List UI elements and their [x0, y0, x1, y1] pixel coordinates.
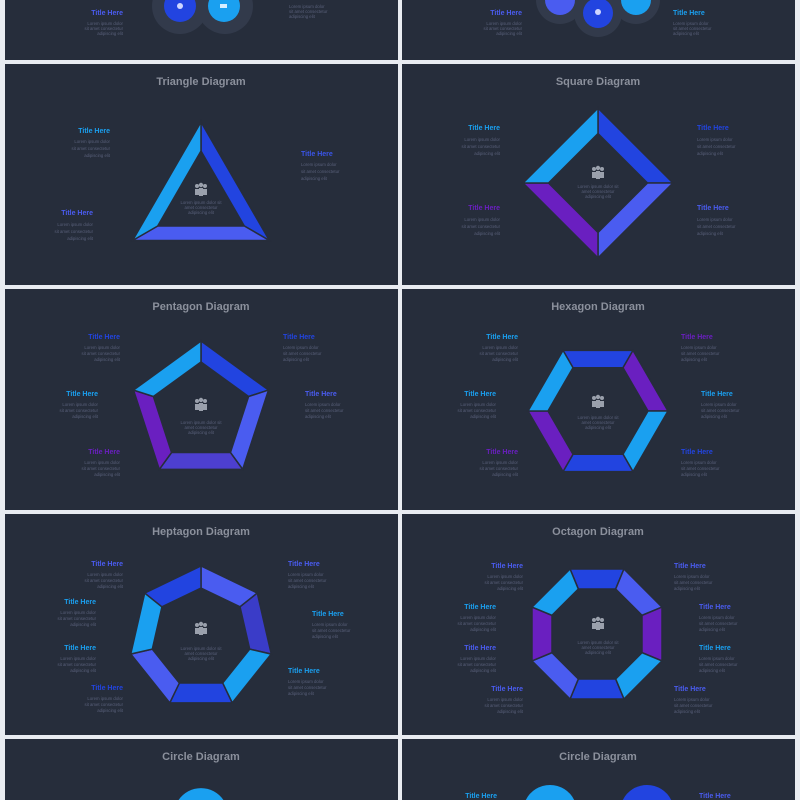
- labels: Title Here: [699, 645, 731, 652]
- labels: adipiscing elit: [470, 627, 497, 632]
- labels: Title Here: [464, 604, 496, 611]
- labels: Lorem ipsum dolor: [84, 345, 121, 350]
- panel: top-left partial circles: adipiscing elit: [289, 14, 316, 19]
- panel: top-left partial circles: Lorem ipsum dolor: [87, 21, 124, 26]
- labels: Title Here: [468, 125, 500, 132]
- labels: [458, 334, 740, 477]
- labels: sit amet consectetur: [458, 621, 497, 626]
- labels: adipiscing elit: [84, 153, 111, 158]
- labels: Lorem ipsum dolor: [312, 622, 348, 627]
- labels: Title Here: [88, 449, 120, 456]
- labels: sit amet consectetur: [462, 144, 501, 149]
- labels: Title Here: [283, 334, 315, 341]
- labels: sit amet consectetur: [681, 351, 720, 356]
- labels: Lorem ipsum dolor: [283, 345, 319, 350]
- panel: circle diagram left: [162, 751, 240, 800]
- labels: sit amet consectetur: [85, 702, 124, 707]
- labels: Lorem ipsum dolor: [60, 656, 97, 661]
- chart: heptagon ring: [131, 566, 271, 703]
- panel: octagon diagram: adipiscing elit: [585, 650, 612, 655]
- panel: square diagram: Lorem ipsum dolor sit: [577, 184, 619, 189]
- labels: sit amet consectetur: [458, 408, 497, 413]
- panel: top-left partial circles: sit amet consectetur: [289, 9, 328, 14]
- labels: adipiscing elit: [312, 634, 339, 639]
- icon: people: [592, 166, 604, 179]
- labels: [55, 128, 340, 241]
- labels: Title Here: [674, 686, 706, 693]
- panel: top-left partial circles: adipiscing elit: [97, 31, 124, 36]
- labels: Lorem ipsum dolor: [464, 217, 501, 222]
- title: square: Square Diagram: [556, 76, 640, 88]
- labels: Title Here: [91, 561, 123, 568]
- labels: sit amet consectetur: [85, 578, 124, 583]
- labels: Title Here: [464, 645, 496, 652]
- labels: Lorem ipsum dolor: [697, 217, 733, 222]
- labels: sit amet consectetur: [283, 351, 322, 356]
- labels: Title Here: [486, 334, 518, 341]
- labels: Lorem ipsum dolor: [701, 402, 737, 407]
- labels: sit amet consectetur: [697, 144, 736, 149]
- panel: square diagram: amet consectetur: [582, 189, 615, 194]
- chart: octagon ring: [532, 569, 662, 699]
- labels: Title Here: [681, 449, 713, 456]
- labels: adipiscing elit: [497, 709, 524, 714]
- panel: hexagon diagram: [458, 301, 740, 477]
- labels: sit amet consectetur: [55, 229, 94, 234]
- panel: top-right partial circles: Lorem ipsum dolor: [673, 21, 709, 26]
- panel: top-left partial circles: [85, 0, 328, 36]
- labels: sit amet consectetur: [58, 616, 97, 621]
- panel: triangle diagram: Lorem ipsum dolor sit: [180, 200, 222, 205]
- labels: adipiscing elit: [288, 584, 315, 589]
- labels: [458, 563, 738, 714]
- panel: circle diagram right: Circle Diagram: [559, 751, 637, 763]
- chart: triangle ring: [133, 122, 269, 248]
- panel: triangle diagram: amet consectetur: [185, 205, 218, 210]
- labels: Lorem ipsum dolor: [87, 696, 124, 701]
- labels: Lorem ipsum dolor: [301, 162, 337, 167]
- labels: adipiscing elit: [305, 414, 332, 419]
- labels: sit amet consectetur: [674, 580, 713, 585]
- labels: Title Here: [288, 668, 320, 675]
- labels: Title Here: [701, 391, 733, 398]
- labels: sit amet consectetur: [681, 466, 720, 471]
- panel: octagon diagram: [458, 526, 738, 714]
- panel: top-right partial circles: adipiscing elit: [496, 31, 523, 36]
- panel: top-left partial circles: Title Here: [91, 10, 123, 17]
- labels: sit amet consectetur: [480, 466, 519, 471]
- labels: Title Here: [697, 205, 729, 212]
- panel: hexagon diagram: adipiscing elit: [585, 425, 612, 430]
- labels: Title Here: [61, 210, 93, 217]
- panel: heptagon diagram: Lorem ipsum dolor sit: [180, 646, 222, 651]
- labels: Title Here: [674, 563, 706, 570]
- labels: sit amet consectetur: [699, 662, 738, 667]
- labels: sit amet consectetur: [72, 146, 111, 151]
- labels: Title Here: [486, 449, 518, 456]
- panel: triangle diagram: adipiscing elit: [188, 210, 215, 215]
- labels: Title Here: [491, 686, 523, 693]
- panel: pentagon diagram: [60, 301, 344, 477]
- labels: adipiscing elit: [674, 586, 701, 591]
- chart: pentagon ring: [134, 341, 268, 469]
- labels: sit amet consectetur: [458, 662, 497, 667]
- labels: sit amet consectetur: [301, 169, 340, 174]
- labels: Title Here: [697, 125, 729, 132]
- labels: adipiscing elit: [470, 668, 497, 673]
- labels: Title Here: [305, 391, 337, 398]
- labels: sit amet consectetur: [58, 662, 97, 667]
- labels: Title Here: [699, 604, 731, 611]
- labels: Title Here: [78, 128, 110, 135]
- panel: top-right partial circles: Lorem ipsum dolor: [486, 21, 523, 26]
- labels: adipiscing elit: [97, 708, 124, 713]
- panel: square diagram: [462, 76, 736, 258]
- labels: Lorem ipsum dolor: [699, 615, 735, 620]
- panel: circle diagram left: Circle Diagram: [162, 751, 240, 763]
- labels: Lorem ipsum dolor: [460, 615, 497, 620]
- icon: people: [592, 617, 604, 630]
- labels: sit amet consectetur: [82, 466, 121, 471]
- labels: adipiscing elit: [72, 414, 99, 419]
- labels: adipiscing elit: [697, 151, 724, 156]
- labels: Lorem ipsum dolor: [482, 345, 519, 350]
- labels: Lorem ipsum dolor: [87, 572, 124, 577]
- icon: people: [195, 183, 207, 196]
- title: heptagon: Heptagon Diagram: [152, 526, 250, 538]
- panel: square diagram: adipiscing elit: [585, 194, 612, 199]
- panel: octagon diagram: amet consectetur: [582, 645, 615, 650]
- labels: sit amet consectetur: [701, 408, 740, 413]
- panel: pentagon diagram: Lorem ipsum dolor sit: [180, 420, 222, 425]
- labels: Lorem ipsum dolor: [487, 574, 524, 579]
- labels: Title Here: [64, 599, 96, 606]
- panel: heptagon diagram: adipiscing elit: [188, 656, 215, 661]
- labels: Lorem ipsum dolor: [288, 572, 324, 577]
- labels: Title Here: [288, 561, 320, 568]
- panel: hexagon diagram: Lorem ipsum dolor sit: [577, 415, 619, 420]
- panel: hexagon diagram: amet consectetur: [582, 420, 615, 425]
- panel: circle diagram right: Title Here: [465, 793, 497, 800]
- labels: [60, 334, 344, 477]
- icon: people: [195, 398, 207, 411]
- labels: adipiscing elit: [70, 622, 97, 627]
- labels: sit amet consectetur: [462, 224, 501, 229]
- labels: Title Here: [88, 334, 120, 341]
- labels: Title Here: [681, 334, 713, 341]
- labels: sit amet consectetur: [60, 408, 99, 413]
- labels: sit amet consectetur: [82, 351, 121, 356]
- labels: adipiscing elit: [701, 414, 728, 419]
- labels: Lorem ipsum dolor: [460, 402, 497, 407]
- labels: Title Here: [91, 685, 123, 692]
- labels: sit amet consectetur: [697, 224, 736, 229]
- labels: Lorem ipsum dolor: [681, 460, 717, 465]
- title: triangle: Triangle Diagram: [156, 76, 246, 88]
- panel: heptagon diagram: [58, 526, 351, 713]
- labels: sit amet consectetur: [485, 580, 524, 585]
- panel: top-right partial circles: sit amet consectetur: [673, 26, 712, 31]
- title: pentagon: Pentagon Diagram: [152, 301, 250, 313]
- chart: hexagon ring: [528, 350, 668, 472]
- labels: adipiscing elit: [301, 176, 328, 181]
- labels: Title Here: [464, 391, 496, 398]
- labels: adipiscing elit: [67, 236, 94, 241]
- labels: adipiscing elit: [492, 357, 519, 362]
- panel: heptagon diagram: amet consectetur: [185, 651, 218, 656]
- labels: sit amet consectetur: [312, 628, 351, 633]
- labels: adipiscing elit: [699, 668, 726, 673]
- labels: Lorem ipsum dolor: [57, 222, 94, 227]
- panel: circle diagram right: Title Here: [699, 793, 731, 800]
- labels: adipiscing elit: [288, 691, 315, 696]
- labels: adipiscing elit: [699, 627, 726, 632]
- panel: top-left partial circles: Lorem ipsum dolor: [289, 4, 325, 9]
- labels: Lorem ipsum dolor: [464, 137, 501, 142]
- labels: adipiscing elit: [674, 709, 701, 714]
- labels: Title Here: [312, 611, 344, 618]
- labels: [58, 561, 351, 713]
- labels: Lorem ipsum dolor: [674, 574, 710, 579]
- labels: Lorem ipsum dolor: [460, 656, 497, 661]
- labels: adipiscing elit: [94, 472, 121, 477]
- labels: Lorem ipsum dolor: [84, 460, 121, 465]
- labels: sit amet consectetur: [485, 703, 524, 708]
- labels: adipiscing elit: [697, 231, 724, 236]
- title: hexagon: Hexagon Diagram: [551, 301, 645, 313]
- panel: top-right partial circles: Title Here: [673, 10, 705, 17]
- panel: top-left partial circles: sit amet consectetur: [85, 26, 124, 31]
- panel: top-right partial circles: adipiscing elit: [673, 31, 700, 36]
- labels: Lorem ipsum dolor: [699, 656, 735, 661]
- labels: Title Here: [66, 391, 98, 398]
- chart: square ring: [523, 108, 673, 258]
- panel: octagon diagram: Lorem ipsum dolor sit: [577, 640, 619, 645]
- labels: Lorem ipsum dolor: [305, 402, 341, 407]
- labels: adipiscing elit: [497, 586, 524, 591]
- labels: adipiscing elit: [97, 584, 124, 589]
- labels: Lorem ipsum dolor: [288, 679, 324, 684]
- icon: people: [592, 395, 604, 408]
- panel: top-right partial circles: sit amet consectetur: [484, 26, 523, 31]
- labels: sit amet consectetur: [288, 685, 327, 690]
- labels: adipiscing elit: [681, 357, 708, 362]
- panel: pentagon diagram: amet consectetur: [185, 425, 218, 430]
- icon: people: [195, 622, 207, 635]
- labels: adipiscing elit: [474, 231, 501, 236]
- labels: adipiscing elit: [492, 472, 519, 477]
- labels: Title Here: [301, 151, 333, 158]
- labels: Lorem ipsum dolor: [74, 139, 111, 144]
- labels: adipiscing elit: [681, 472, 708, 477]
- labels: Lorem ipsum dolor: [482, 460, 519, 465]
- labels: adipiscing elit: [474, 151, 501, 156]
- title: octagon: Octagon Diagram: [552, 526, 644, 538]
- panel: circle diagram right: [465, 751, 731, 800]
- panel: top-right partial circles: [484, 0, 712, 37]
- labels: sit amet consectetur: [480, 351, 519, 356]
- labels: [462, 125, 736, 236]
- labels: Title Here: [468, 205, 500, 212]
- labels: adipiscing elit: [283, 357, 310, 362]
- labels: Lorem ipsum dolor: [60, 610, 97, 615]
- labels: sit amet consectetur: [674, 703, 713, 708]
- labels: sit amet consectetur: [288, 578, 327, 583]
- panel: triangle diagram: [55, 76, 340, 248]
- labels: adipiscing elit: [70, 668, 97, 673]
- labels: sit amet consectetur: [699, 621, 738, 626]
- labels: Lorem ipsum dolor: [62, 402, 99, 407]
- labels: Lorem ipsum dolor: [681, 345, 717, 350]
- labels: Lorem ipsum dolor: [674, 697, 710, 702]
- labels: Title Here: [491, 563, 523, 570]
- labels: adipiscing elit: [470, 414, 497, 419]
- labels: adipiscing elit: [94, 357, 121, 362]
- labels: Lorem ipsum dolor: [697, 137, 733, 142]
- panel: pentagon diagram: adipiscing elit: [188, 430, 215, 435]
- panel: top-right partial circles: Title Here: [490, 10, 522, 17]
- labels: sit amet consectetur: [305, 408, 344, 413]
- labels: Lorem ipsum dolor: [487, 697, 524, 702]
- labels: Title Here: [64, 645, 96, 652]
